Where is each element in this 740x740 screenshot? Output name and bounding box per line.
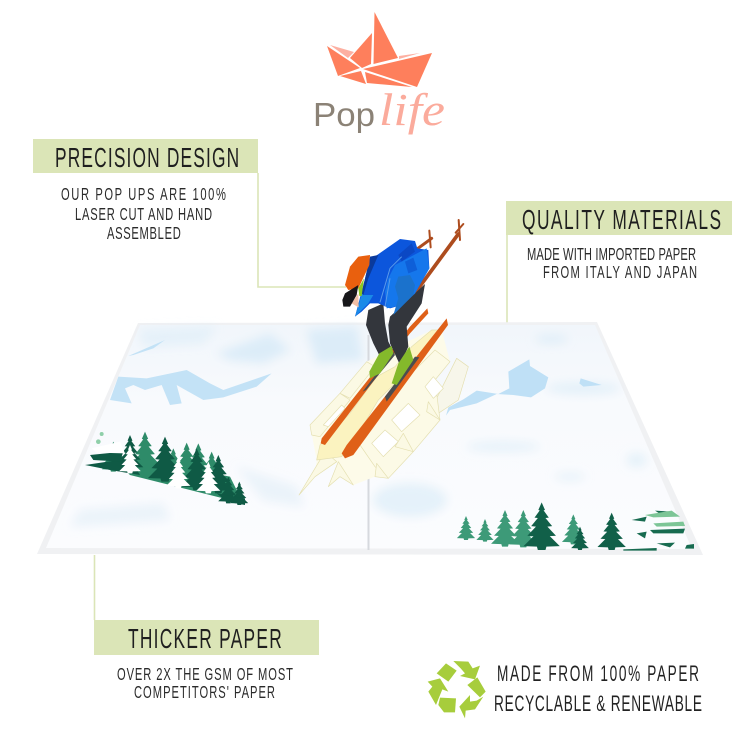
small blue peak right [579,378,602,387]
jacket [355,239,429,317]
icon: origami boat [327,12,432,87]
callout: thicker paper [94,620,319,703]
small blue peak [128,340,165,356]
ski poles [416,220,463,292]
body text: FROM ITALY AND JAPAN [543,262,697,283]
body text: MADE WITH IMPORTED PAPER [527,244,696,265]
paper lattice structure [299,330,468,495]
goggles [342,285,358,307]
heading: PRECISION DESIGN [55,142,239,173]
ski boots [369,346,413,385]
goggle strap [358,278,364,296]
heading band [506,201,732,235]
logo wordmark Pop: Pop [313,96,375,133]
blue mountain [446,359,548,416]
tree group right [457,502,694,551]
connector lines [94,173,507,620]
right page scenery [373,335,694,551]
skis [321,308,448,458]
heading: THICKER PAPER [128,623,282,654]
pale clouds [373,335,647,517]
recycling statement: MADE FROM 100% PAPER [497,661,699,686]
body text [117,664,293,703]
body text [527,244,697,283]
body text: OUR POP UPS ARE 100% [61,184,226,205]
body text [61,184,226,244]
card surface [46,325,692,549]
pale mountains [70,327,363,527]
body text: LASER CUT AND HAND [75,204,212,225]
callout: quality materials [506,201,732,283]
pop-up skier [321,220,463,458]
pop-up card base [37,322,703,555]
logo wordmark life: life [379,84,445,135]
heading: QUALITY MATERIALS [522,204,721,235]
face [352,293,359,307]
head [342,255,370,307]
heading band [94,620,319,655]
center fold [368,335,370,550]
ski bindings [363,352,419,402]
heading band [33,139,258,173]
body text: ASSEMBLED [107,223,181,244]
body text: COMPETITORS' PAPER [134,682,275,703]
logo: Poplife [313,12,445,135]
callout: precision design [33,139,258,244]
body text: OVER 2X THE GSM OF MOST [117,664,293,685]
recycling statement [494,661,702,716]
helmet [345,255,370,290]
icon: recycling arrows [428,661,486,718]
tree group left [85,432,248,505]
legs [366,284,425,365]
card border [37,322,703,555]
blue mountain range [110,370,272,405]
recycling statement: RECYCLABLE & RENEWABLE [494,691,702,716]
snowy tree stripes [623,511,694,551]
left page scenery [70,327,363,527]
